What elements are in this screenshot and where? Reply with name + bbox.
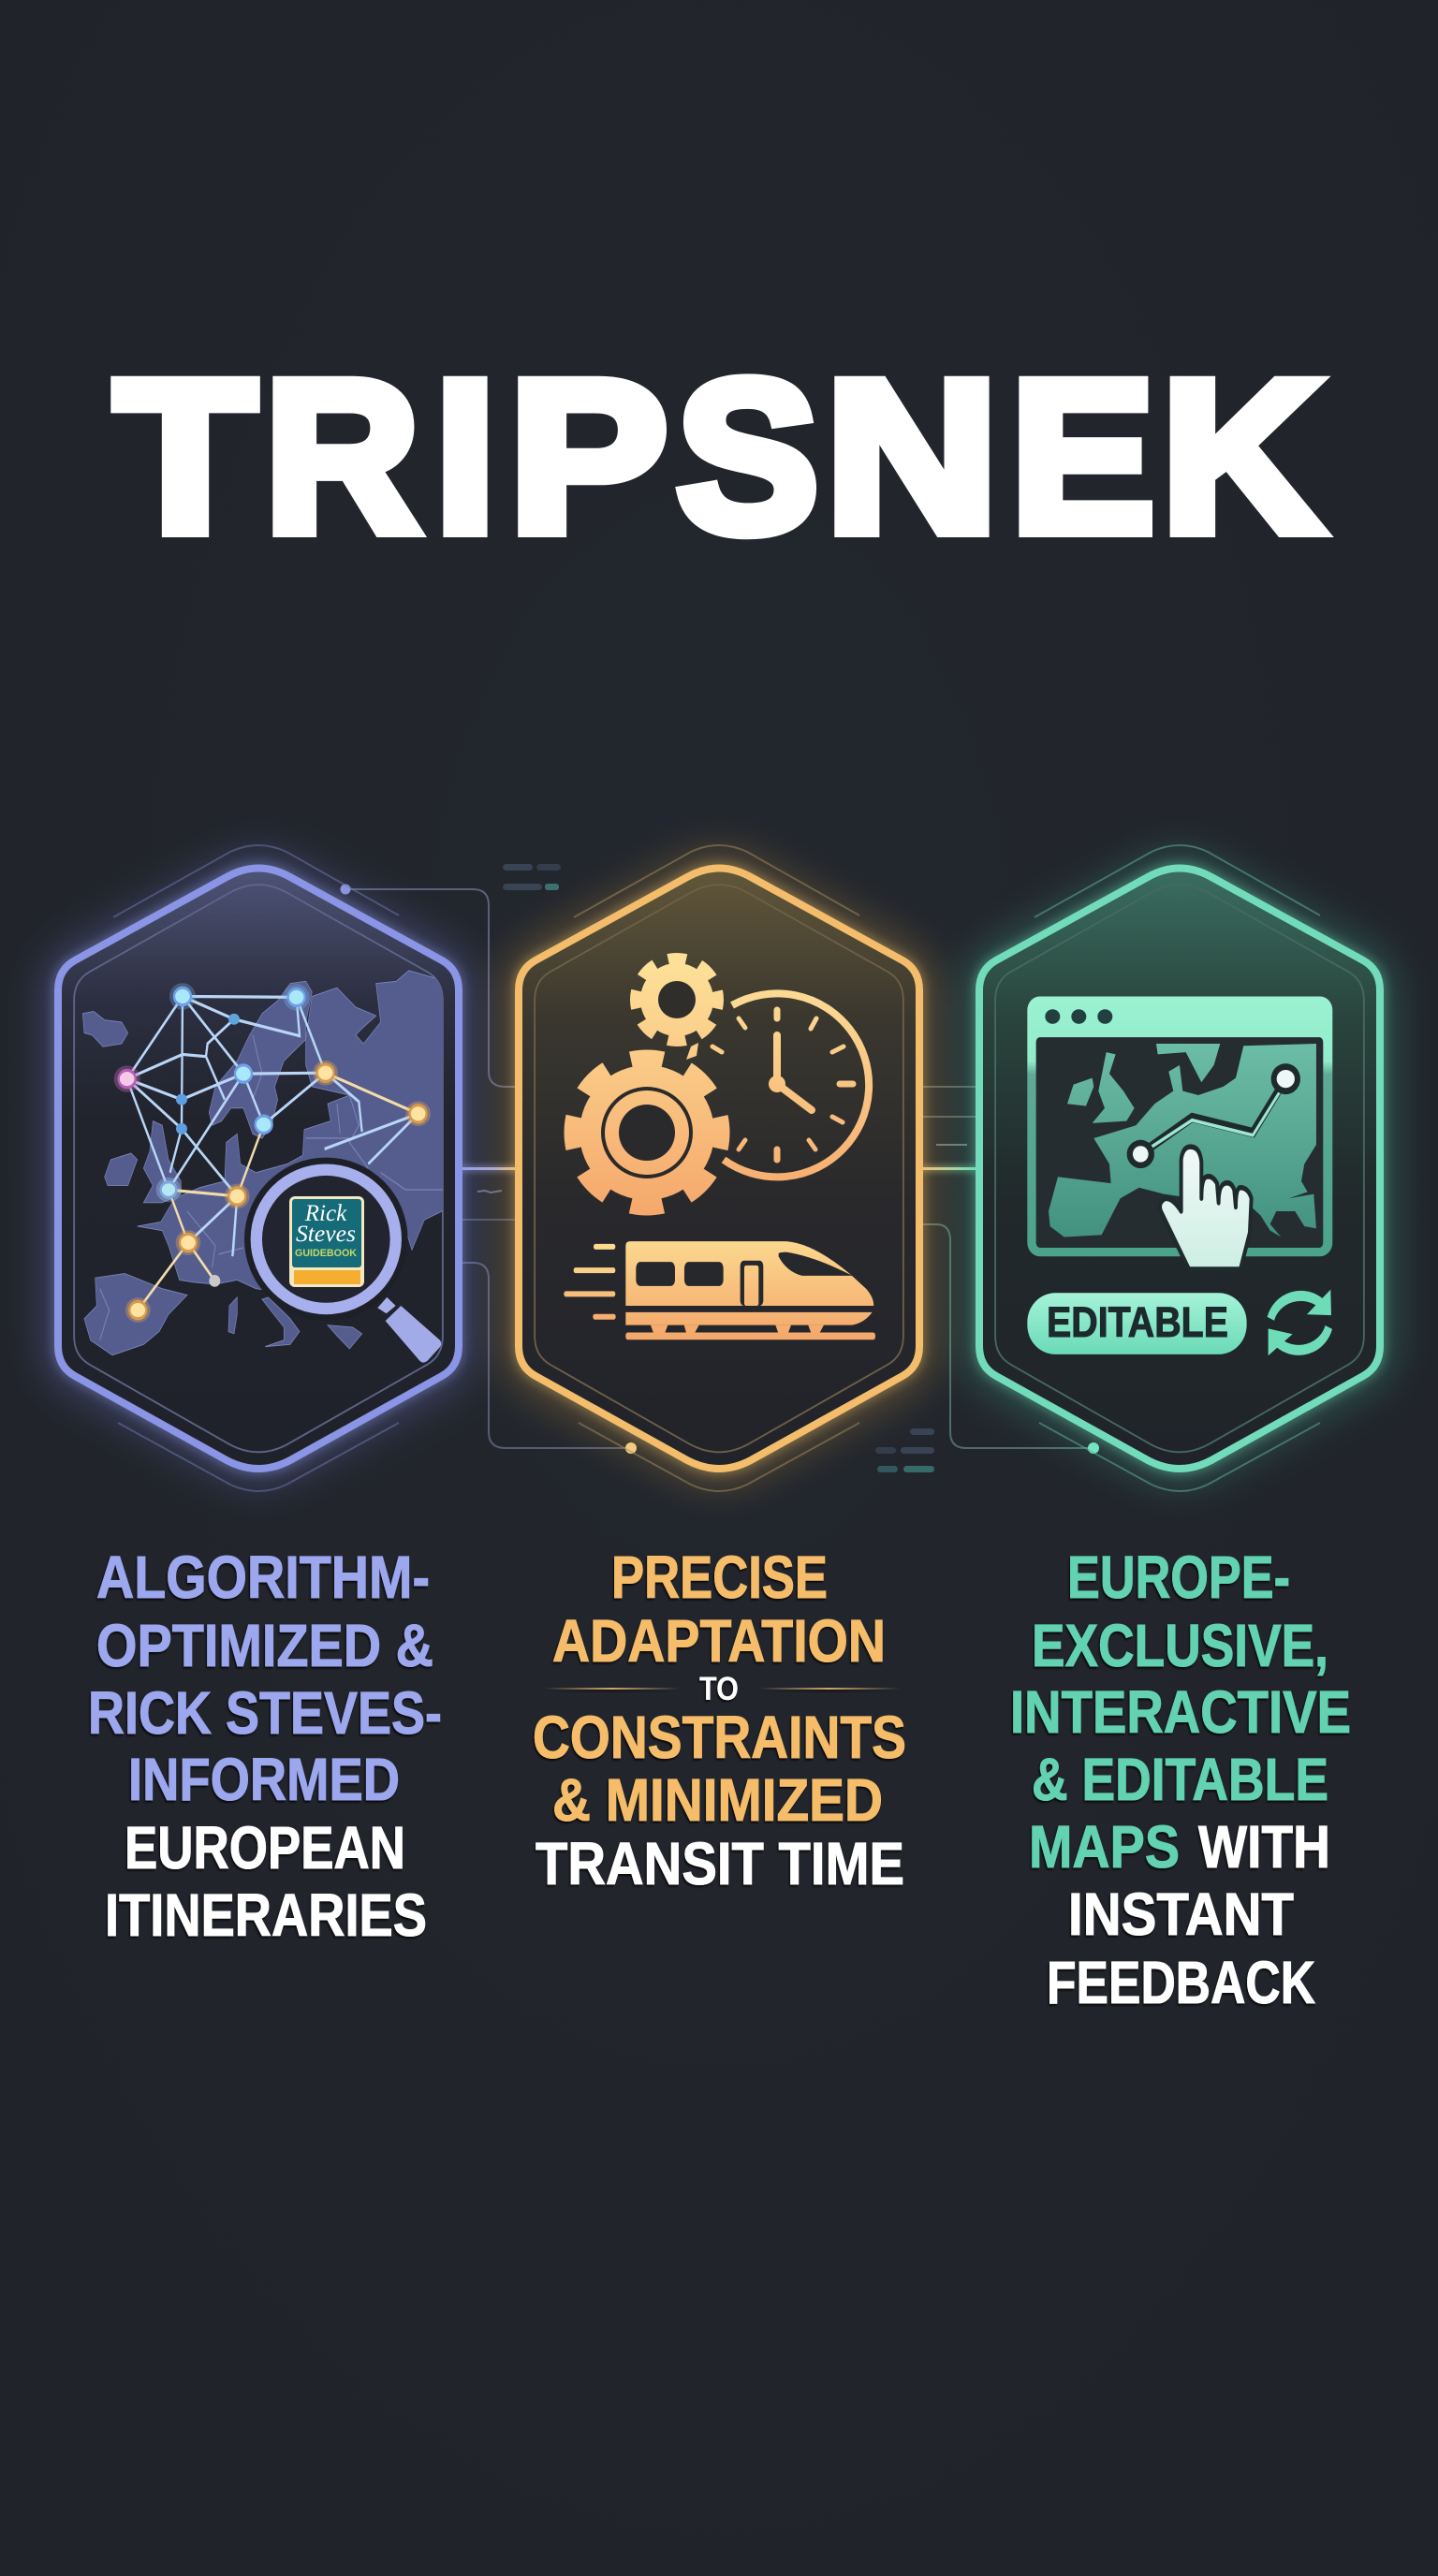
panel: constraints and transit time [519,845,919,1491]
route nodes [114,983,431,1323]
text block: algorithm-optimized itineraries: OPTIMIZED & [96,1612,433,1679]
text block: europe-exclusive maps: INTERACTIVE [1010,1678,1351,1746]
icon: refresh arrows [1269,1290,1331,1355]
title: E [1011,336,1154,577]
text block: europe-exclusive maps: FEEDBACK [1047,1949,1315,2016]
orange hexagon frame [519,845,919,1491]
title: R [265,336,419,577]
icon: clock [686,993,869,1177]
Rick Steves guidebook [289,1196,364,1287]
Europe map [1049,1044,1316,1237]
text block: algorithm-optimized itineraries: EUROPEAN [125,1814,405,1881]
Rick Steves guidebook: Steves [296,1222,356,1247]
text block: algorithm-optimized itineraries: ALGORITHM- [96,1544,430,1611]
text block: europe-exclusive maps: & EDITABLE [1032,1746,1328,1813]
magnifying glass [244,1158,441,1363]
icon: high-speed train [564,1241,875,1339]
text block: precise adaptation: TO [699,1671,739,1707]
Rick Steves guidebook: GUIDEBOOK [295,1248,357,1259]
network edges [127,996,418,1256]
blue hexagon frame [58,845,459,1491]
browser window [1027,996,1332,1256]
route with endpoints [1127,1063,1300,1168]
text block: europe-exclusive maps: EXCLUSIVE, [1032,1612,1328,1679]
title: P [509,336,668,577]
icon: large gear [574,1060,720,1206]
text block: precise adaptation: ADAPTATION [552,1607,886,1675]
title: S [677,336,818,577]
text block: algorithm-optimized itineraries: RICK STEVES- [88,1679,442,1747]
text block: europe-exclusive maps: EUROPE- [1067,1544,1290,1611]
text block: algorithm-optimized itineraries: ITINERARIES [105,1881,427,1949]
decorative data dashes top [503,864,561,890]
panel: interactive editable maps [979,845,1380,1491]
borders [100,1035,443,1340]
green hexagon frame [979,845,1380,1491]
icon: pointing hand [1160,1147,1252,1269]
editable label: EDITABLE [1047,1298,1228,1346]
text block: europe-exclusive maps: INSTANT [1068,1881,1294,1948]
text block: precise adaptation: & MINIMIZED [552,1766,883,1834]
connector lines between panels [341,884,1099,1454]
text block: precise adaptation: TRANSIT TIME [536,1830,904,1897]
text block: precise adaptation: PRECISE [611,1544,828,1611]
icon: small gear [637,959,717,1040]
text block: europe-exclusive maps: MAPS [1029,1813,1180,1881]
decorative data dashes bottom [875,1428,934,1472]
Rick Steves guidebook: Rick [304,1201,347,1226]
text block: algorithm-optimized itineraries: INFORMED [128,1746,400,1813]
editable button [1027,1293,1247,1354]
Europe map with route network [82,971,447,1355]
title: K [1162,336,1322,577]
text block: europe-exclusive maps: WITH [1198,1813,1330,1881]
panel: algorithm and Rick Steves map [58,845,459,1491]
text block: algorithm-optimized itineraries [88,1544,442,1949]
title: N [826,336,998,577]
title: I [435,336,495,577]
title: T [115,336,256,577]
text block: precise adaptation: CONSTRAINTS [533,1704,906,1771]
text block: precise adaptation [533,1544,906,1897]
text block: europe-exclusive maps [1010,1544,1351,2016]
